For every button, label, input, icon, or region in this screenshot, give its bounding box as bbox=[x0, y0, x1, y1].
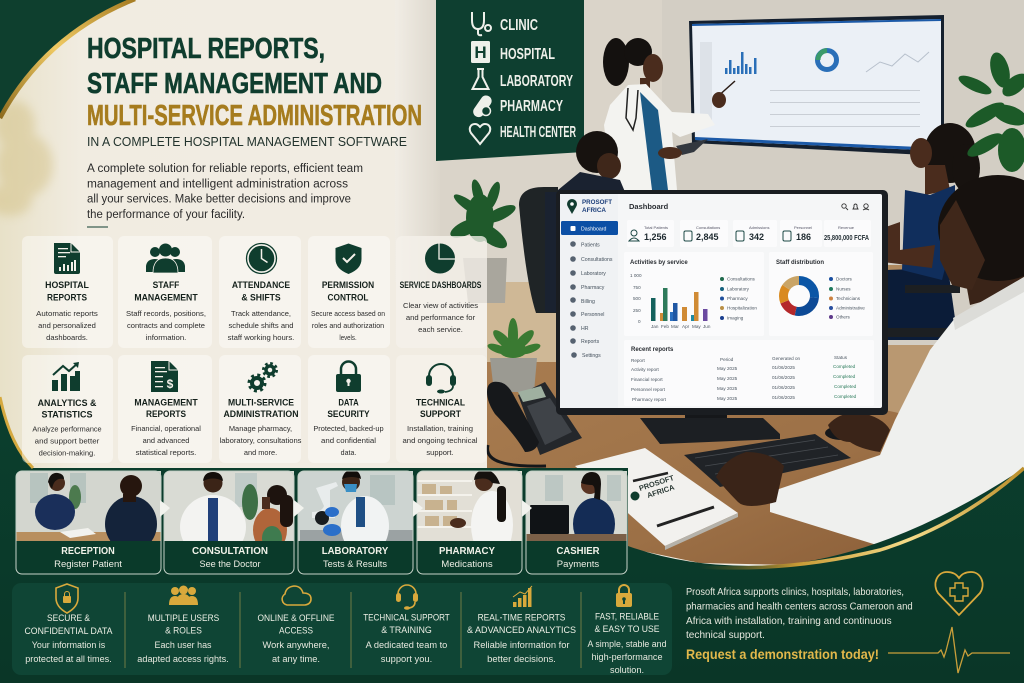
recent reports table: Personnel report bbox=[631, 387, 666, 392]
sign labels bbox=[500, 17, 576, 141]
card: analytics and statistics: Analyze performance bbox=[32, 424, 102, 434]
benefit: online and offline: at any time. bbox=[272, 654, 320, 664]
benefit: online and offline: ONLINE & OFFLINE bbox=[258, 613, 334, 623]
card: hospital reports: HOSPITAL bbox=[45, 280, 89, 291]
benefit: technical support: TECHNICAL SUPPORT bbox=[363, 612, 450, 622]
heartbeat line bbox=[888, 627, 1010, 673]
step: reception: RECEPTION bbox=[61, 545, 115, 557]
dashboard title: Dashboard bbox=[629, 202, 669, 211]
benefit: fast and reliable: solution. bbox=[610, 665, 644, 675]
benefit: multiple users: MULTIPLE USERS bbox=[148, 613, 219, 623]
step: cashier bbox=[526, 471, 627, 574]
sign labels: CLINIC bbox=[500, 17, 538, 34]
card: multi-service administration: Manage pharmacy, bbox=[229, 424, 292, 433]
recent reports table: 01/06/2025 bbox=[772, 385, 795, 390]
KPI row bbox=[627, 220, 871, 247]
benefits strip bbox=[12, 583, 672, 675]
KPI row: Revenue bbox=[838, 225, 855, 230]
recent reports table: Completed bbox=[833, 364, 856, 369]
card: data security bbox=[308, 355, 390, 463]
benefit: fast and reliable: FAST, RELIABLE bbox=[595, 612, 659, 622]
card: analytics and statistics: STATISTICS bbox=[42, 410, 92, 420]
step: pharmacy: Medications bbox=[441, 559, 493, 570]
recent reports table: Completed bbox=[834, 394, 857, 399]
bar chart: activities by service: 1 000 bbox=[630, 273, 642, 278]
recent reports table: May 2025 bbox=[717, 366, 738, 371]
benefit: fast and reliable: high-performance bbox=[592, 652, 662, 662]
card: management reports: REPORTS bbox=[146, 409, 186, 420]
card: data security: Protected, backed-up bbox=[313, 424, 384, 433]
support statement: Prosoft Africa supports clinics, hospitals, laboratories, bbox=[686, 586, 904, 598]
donut chart: staff distribution: Administrative bbox=[836, 306, 865, 310]
step: pharmacy: PHARMACY bbox=[439, 545, 495, 557]
plant right bbox=[956, 50, 1024, 172]
recent reports table: Pharmacy report bbox=[632, 397, 667, 402]
sidebar menu: Reports bbox=[581, 339, 600, 345]
bar chart: activities by service: Consultations bbox=[727, 276, 756, 282]
benefit: online and offline bbox=[258, 586, 334, 664]
donut chart: staff distribution: Doctors bbox=[836, 276, 853, 282]
card: management reports: $ bbox=[167, 377, 174, 391]
sign labels: HEALTH CENTER bbox=[500, 124, 576, 141]
wall sign bbox=[436, 0, 584, 161]
benefit: fast and reliable: A simple, stable and bbox=[588, 639, 666, 649]
benefit: fast and reliable: & EASY TO USE bbox=[594, 624, 660, 634]
card: service dashboards: and performance for bbox=[406, 313, 476, 322]
recent reports table: May 2025 bbox=[717, 396, 738, 401]
card: analytics and statistics bbox=[22, 355, 113, 463]
card: technical support: Installation, training bbox=[407, 424, 473, 433]
recent reports table: Report bbox=[631, 358, 646, 363]
card: attendance and shifts: ATTENDANCE bbox=[232, 280, 290, 291]
donut chart: staff distribution bbox=[769, 252, 873, 336]
intro paragraph: the performance of your facility. bbox=[87, 209, 245, 221]
bar chart: activities by service: Imaging bbox=[727, 316, 744, 320]
benefit: real-time reports bbox=[467, 586, 576, 664]
bar chart: activities by service: Pharmacy bbox=[727, 296, 748, 301]
sidebar menu: Laboratory bbox=[581, 271, 606, 277]
card: multi-service administration: and more. bbox=[244, 448, 277, 457]
card: multi-service administration: laboratory, consultations bbox=[220, 436, 302, 445]
icon: heart with cross bbox=[935, 572, 983, 615]
card: technical support: support. bbox=[426, 448, 454, 457]
step: consultation: See the Doctor bbox=[200, 559, 260, 570]
card: service dashboards: each service. bbox=[418, 325, 463, 334]
KPI row: 2,845 bbox=[696, 232, 719, 242]
recent reports table: Activity report bbox=[631, 367, 660, 372]
KPI row: Admissions bbox=[749, 225, 769, 230]
sidebar menu: Patients bbox=[581, 242, 600, 248]
title bbox=[87, 33, 422, 132]
top-left green corner with gold arc bbox=[0, 0, 135, 118]
card: service dashboards: Clear view of activities bbox=[403, 301, 478, 310]
bottom gold arc bbox=[700, 468, 1024, 568]
benefit: technical support bbox=[363, 585, 450, 664]
seated man bbox=[519, 131, 625, 313]
flow arrows bbox=[160, 500, 532, 517]
card: hospital reports: REPORTS bbox=[47, 292, 87, 304]
bar chart: activities by service: 750 bbox=[633, 285, 641, 290]
sign icon: stethoscope bbox=[472, 12, 491, 35]
card: management reports: statistical reports. bbox=[136, 448, 196, 457]
bar chart: activities by service: 500 bbox=[633, 296, 641, 301]
support statement: technical support. bbox=[686, 629, 765, 641]
recent reports table: Completed bbox=[833, 374, 856, 379]
card: attendance and shifts: schedule shifts and bbox=[228, 321, 294, 330]
bar chart: activities by service: Jun bbox=[703, 324, 711, 329]
card: data security: and confidential bbox=[321, 436, 376, 445]
benefit: multiple users: Each user has bbox=[154, 640, 212, 650]
notebook: PROSOFT bbox=[638, 473, 675, 493]
card: analytics and statistics: decision-making. bbox=[39, 448, 95, 458]
recent reports table: Period bbox=[720, 357, 734, 362]
logo: PROSOFT bbox=[582, 199, 612, 206]
intro paragraph: A complete solution for reliable reports, efficient team bbox=[87, 163, 363, 175]
sign labels: LABORATORY bbox=[500, 73, 573, 90]
card: multi-service administration: ADMINISTRATION bbox=[224, 409, 299, 420]
office scene bbox=[395, 0, 1024, 565]
gold tree watermark bbox=[0, 101, 53, 216]
card: attendance and shifts: & SHIFTS bbox=[241, 292, 281, 304]
card: hospital reports: and personalized bbox=[38, 321, 96, 330]
notebook bbox=[575, 448, 738, 550]
card: hospital reports: Automatic reports bbox=[36, 309, 98, 318]
bar chart: activities by service: Hospitalization bbox=[727, 306, 757, 310]
step: laboratory: LABORATORY bbox=[322, 545, 388, 557]
KPI row: Consultations bbox=[696, 225, 720, 230]
card: data security: data. bbox=[341, 448, 356, 457]
benefit: technical support: A dedicated team to bbox=[366, 640, 447, 650]
recent reports table: 01/06/2025 bbox=[772, 375, 795, 380]
sign icon: flask bbox=[472, 69, 488, 89]
wall TV dashboard bbox=[689, 15, 944, 156]
card: staff management: information. bbox=[146, 333, 186, 342]
benefit: online and offline: ACCESS bbox=[279, 626, 313, 636]
support statement: pharmacies and health centers across Cameroon and bbox=[686, 600, 913, 612]
card: technical support bbox=[396, 355, 487, 463]
card: analytics and statistics: ANALYTICS & bbox=[38, 398, 96, 409]
bar chart: activities by service: Laboratory bbox=[727, 286, 750, 292]
recent reports table: Generated on bbox=[772, 356, 801, 361]
card: permission control: PERMISSION bbox=[322, 280, 374, 291]
benefit: technical support: & TRAINING bbox=[381, 625, 432, 635]
seated woman bbox=[883, 123, 980, 340]
card: staff management: contracts and complete bbox=[127, 321, 205, 330]
card: multi-service administration: MULTI-SERVICE bbox=[228, 398, 294, 408]
card: management reports: and advanced bbox=[143, 436, 189, 445]
KPI row: 25,800,000 FCFA bbox=[824, 235, 869, 242]
step: cashier: CASHIER bbox=[556, 545, 600, 557]
benefit: online and offline: Work anywhere, bbox=[262, 640, 330, 650]
sign icon: hospital: H bbox=[474, 43, 487, 62]
sidebar menu: Consultations bbox=[581, 257, 613, 263]
card: analytics and statistics: and support better bbox=[35, 436, 100, 446]
step: pharmacy bbox=[417, 470, 522, 574]
benefit: secure data bbox=[24, 584, 112, 664]
benefit: real-time reports: Reliable information for bbox=[474, 640, 570, 650]
benefit: secure data: protected at all times. bbox=[25, 654, 112, 664]
recent reports table: Financial report bbox=[631, 377, 663, 382]
card: hospital reports bbox=[22, 236, 113, 348]
feature cards grid bbox=[22, 236, 487, 463]
potted plant on desk bbox=[486, 318, 542, 392]
card: management reports: Financial, operational bbox=[131, 424, 201, 433]
sidebar menu: Settings bbox=[582, 353, 601, 359]
sign icon: pills bbox=[471, 93, 494, 119]
sign icon: hospital bbox=[471, 41, 490, 63]
benefit: real-time reports: & ADVANCED ANALYTICS bbox=[467, 625, 576, 635]
benefit: secure data: Your information is bbox=[32, 640, 106, 650]
bar chart: activities by service: Activities by service bbox=[630, 260, 688, 266]
sign labels: PHARMACY bbox=[500, 98, 563, 115]
recent reports table: 01/06/2025 bbox=[772, 365, 795, 370]
sidebar menu bbox=[561, 221, 618, 359]
card: service dashboards bbox=[396, 236, 487, 348]
keyboard and mouse bbox=[684, 426, 859, 487]
KPI row: Total Patients bbox=[644, 225, 668, 230]
card: permission control: roles and authorization bbox=[312, 321, 384, 330]
bar chart: activities by service: Apr bbox=[682, 324, 690, 329]
benefit: multiple users: & ROLES bbox=[165, 626, 202, 636]
bar chart: activities by service: May bbox=[692, 324, 701, 329]
recent reports table bbox=[624, 340, 874, 406]
title: HOSPITAL REPORTS, bbox=[87, 33, 325, 65]
header icons bbox=[842, 204, 869, 210]
benefit: secure data: CONFIDENTIAL DATA bbox=[24, 626, 112, 636]
recent reports table: 01/06/2025 bbox=[772, 395, 795, 400]
sidebar menu: Pharmacy bbox=[581, 285, 605, 291]
intro paragraph: management and intelligent administration across bbox=[87, 178, 348, 190]
step: laboratory bbox=[298, 470, 413, 574]
recent reports table: Completed bbox=[834, 384, 857, 389]
logo: AFRICA bbox=[582, 207, 606, 214]
bar chart: activities by service: Jan bbox=[651, 324, 659, 329]
card: technical support: SUPPORT bbox=[420, 409, 461, 420]
benefit: real-time reports: REAL-TIME REPORTS bbox=[478, 612, 565, 622]
support statement bbox=[686, 586, 913, 641]
KPI row: Personnel bbox=[794, 225, 812, 230]
doctor at desk bbox=[716, 175, 1024, 546]
step: laboratory: Tests & Results bbox=[323, 559, 387, 570]
plant behind monitor bbox=[448, 178, 518, 303]
desktop monitor dashboard bbox=[556, 190, 888, 415]
logo bbox=[567, 199, 612, 214]
card: technical support: and ongoing technical bbox=[402, 436, 478, 445]
card: staff management: STAFF bbox=[153, 280, 180, 291]
card: attendance and shifts: staff working hours. bbox=[228, 333, 294, 342]
card: permission control bbox=[308, 236, 390, 348]
title: MULTI-SERVICE ADMINISTRATION bbox=[87, 100, 422, 132]
presenter bbox=[603, 38, 735, 190]
benefit: technical support: support you. bbox=[381, 654, 432, 664]
KPI row: 186 bbox=[796, 232, 811, 242]
subtitle: IN A COMPLETE HOSPITAL MANAGEMENT SOFTWARE bbox=[87, 134, 407, 149]
card: data security: DATA bbox=[338, 398, 359, 408]
step: cashier: Payments bbox=[557, 559, 599, 570]
bar chart: activities by service bbox=[624, 252, 764, 336]
notebook: AFRICA bbox=[646, 482, 676, 500]
call to action: Request a demonstration today! bbox=[686, 646, 879, 662]
card: attendance and shifts bbox=[219, 236, 301, 348]
benefit: real-time reports: better decisions. bbox=[487, 654, 556, 664]
donut chart: staff distribution: Nurses bbox=[836, 286, 851, 292]
card: data security: SECURITY bbox=[327, 409, 370, 420]
monitor stand bbox=[640, 412, 780, 444]
card: permission control: Secure access based on bbox=[311, 309, 385, 318]
sidebar menu: Dashboard bbox=[581, 226, 606, 232]
benefit: secure data: SECURE & bbox=[47, 613, 90, 623]
card: staff management: MANAGEMENT bbox=[134, 292, 198, 304]
card: attendance and shifts: Track attendance, bbox=[231, 309, 291, 318]
floor bbox=[487, 282, 662, 400]
recent reports table: May 2025 bbox=[717, 386, 738, 391]
bar chart: activities by service: Feb bbox=[661, 324, 669, 329]
sidebar menu: Personnel bbox=[581, 312, 604, 318]
KPI row: 1,256 bbox=[644, 232, 667, 242]
benefit: multiple users: adapted access rights. bbox=[137, 654, 229, 664]
bar chart: activities by service: 0 bbox=[638, 319, 641, 324]
step: reception: Register Patient bbox=[54, 559, 122, 570]
sign icon: heart bbox=[470, 124, 490, 144]
card: management reports: MANAGEMENT bbox=[134, 398, 198, 408]
recent reports table: Status bbox=[834, 355, 848, 360]
card: technical support: TECHNICAL bbox=[416, 398, 465, 408]
bottom green band bbox=[0, 397, 1024, 683]
intro paragraph bbox=[87, 163, 363, 221]
step: reception bbox=[16, 471, 161, 574]
support statement: Africa with installation, training and continuous bbox=[686, 615, 892, 627]
title: STAFF MANAGEMENT AND bbox=[87, 68, 382, 100]
step: consultation: CONSULTATION bbox=[192, 545, 268, 557]
card: multi-service administration bbox=[219, 355, 302, 463]
card: service dashboards: SERVICE DASHBOARDS bbox=[400, 280, 481, 291]
card: staff management bbox=[118, 236, 212, 348]
step: consultation bbox=[164, 471, 294, 574]
bar chart: activities by service: 250 bbox=[633, 308, 641, 313]
card: permission control: CONTROL bbox=[328, 292, 369, 304]
sidebar menu: HR bbox=[581, 326, 589, 332]
desk phone bbox=[487, 382, 582, 466]
card: staff management: Staff records, positions, bbox=[126, 309, 206, 318]
recent reports table: Recent reports bbox=[631, 347, 674, 353]
sidebar menu: Billing bbox=[581, 299, 595, 305]
patient journey cards bbox=[16, 470, 627, 574]
donut chart: staff distribution: Technicians bbox=[836, 296, 861, 301]
sign labels: HOSPITAL bbox=[500, 46, 555, 63]
benefit: multiple users bbox=[137, 586, 229, 664]
card: permission control: levels. bbox=[339, 333, 357, 342]
intro paragraph: all your services. Make better decisions and improve bbox=[87, 194, 351, 206]
recent reports table: May 2025 bbox=[717, 376, 738, 381]
bar chart: activities by service: Mar bbox=[671, 324, 679, 329]
card: hospital reports: dashboards. bbox=[46, 333, 88, 342]
lower-left gold edge bbox=[0, 397, 33, 468]
donut chart: staff distribution: Staff distribution bbox=[776, 260, 824, 266]
donut chart: staff distribution: Others bbox=[836, 314, 850, 320]
wooden desk bbox=[487, 362, 960, 565]
benefit: fast and reliable bbox=[588, 585, 666, 675]
card: management reports bbox=[118, 355, 212, 463]
KPI row: 342 bbox=[749, 232, 764, 242]
